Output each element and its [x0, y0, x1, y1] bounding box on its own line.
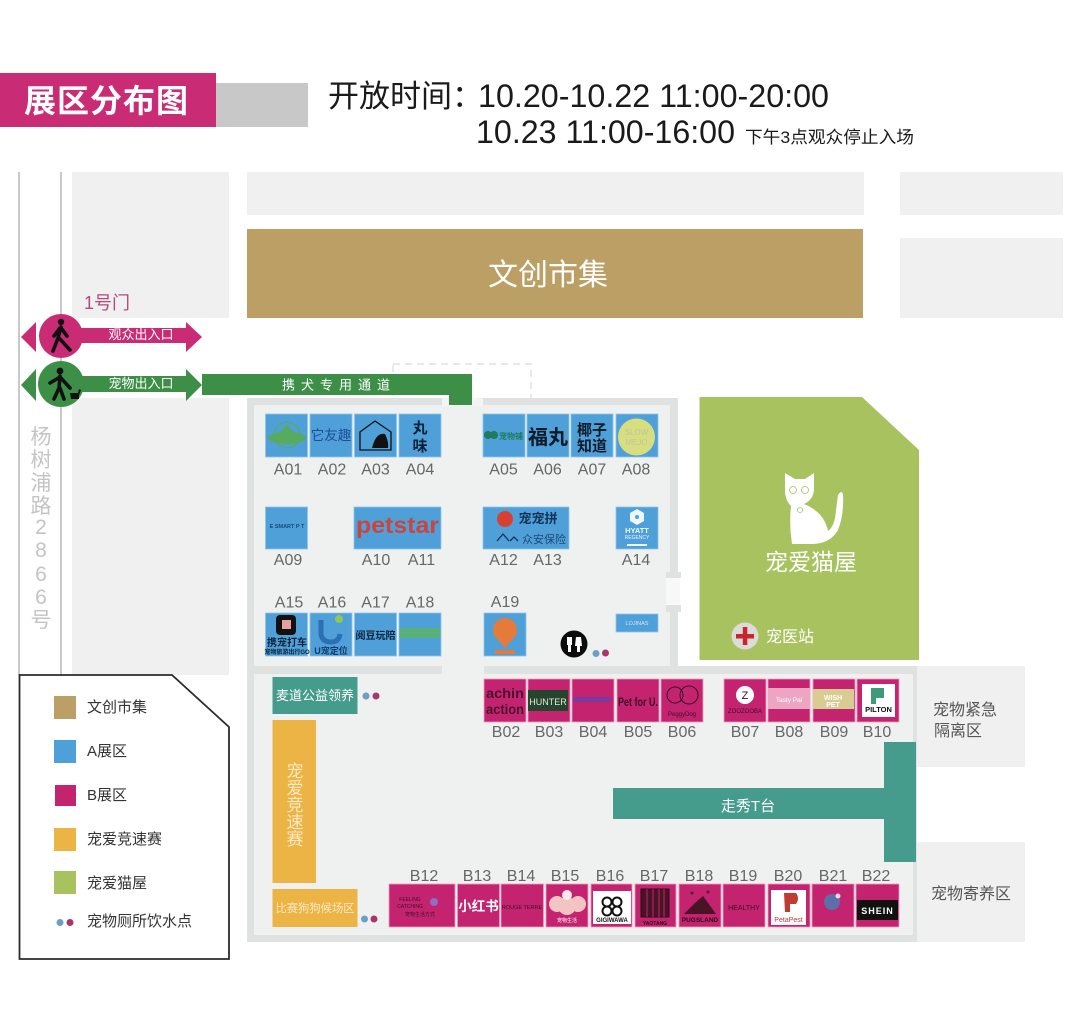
- booth A14: A14: [622, 552, 650, 569]
- street name: 杨: [30, 426, 52, 449]
- booth B13: B13: [463, 868, 491, 885]
- racing area: 爱: [286, 779, 304, 798]
- booth B04: B04: [579, 724, 607, 741]
- boarding area: 宠物寄养区: [931, 885, 1011, 903]
- booth A12 A13: [483, 507, 569, 569]
- audience entrance arrow: 观众出入口: [108, 327, 174, 342]
- booth B09: WISH: [824, 695, 842, 702]
- booth A02: 它友趣: [311, 427, 352, 443]
- gate label: 1号门: [84, 293, 130, 313]
- booth A17: 阅豆玩陪: [356, 629, 396, 642]
- booth B18: [679, 868, 721, 927]
- opening hours: [328, 78, 914, 150]
- racing area: 宠: [286, 762, 304, 781]
- booth B05: B05: [624, 724, 652, 741]
- isolation area: 宠物紧急: [933, 701, 997, 719]
- booth B02: B02: [492, 724, 520, 741]
- booth A08: MEJO: [625, 438, 648, 447]
- title: 展区分布图: [24, 83, 188, 119]
- icon: cat: [785, 473, 843, 544]
- booth A03: A03: [361, 462, 390, 478]
- booth A02: [310, 414, 352, 478]
- booth A02: A02: [318, 462, 346, 478]
- legend item 文创市集: 文创市集: [87, 699, 147, 716]
- booth A06: 福丸: [528, 426, 568, 449]
- booth A15: [264, 594, 310, 656]
- A zone row 1: [266, 414, 658, 478]
- booth B14: ROUGE TERRE: [502, 905, 542, 911]
- booth A03: [354, 414, 396, 478]
- B zone lower row: [389, 868, 899, 927]
- booth B09: PET: [826, 702, 841, 709]
- racing area: [272, 720, 316, 883]
- booth A04: 味: [412, 438, 428, 455]
- booth B18: PUGSLAND: [682, 917, 719, 924]
- booth A12 A13: A12: [489, 552, 518, 569]
- booth A04: [399, 414, 441, 478]
- booth B06: PeggyDog: [668, 712, 696, 718]
- booth B17: [635, 868, 676, 927]
- booth B02: achin: [486, 685, 524, 701]
- booth A16: A16: [318, 594, 346, 612]
- booth B20: B20: [774, 868, 802, 885]
- booth B21: [812, 868, 854, 927]
- legend item 宠爱竞速赛: [54, 828, 162, 851]
- catwalk T stage: [613, 742, 916, 862]
- booth B22: B22: [862, 868, 890, 885]
- booth A07: 知道: [577, 437, 607, 455]
- isolation area: 隔离区: [934, 722, 982, 740]
- booth B12: [389, 868, 455, 927]
- booth A04: 丸: [412, 420, 428, 437]
- booth A10 A11: petstar: [356, 512, 439, 538]
- vet station: [732, 622, 814, 650]
- racing area: 竞: [286, 796, 304, 815]
- booth A12 A13: A13: [533, 552, 562, 569]
- booth B13: [458, 868, 500, 927]
- legend item A展区: A展区: [87, 743, 127, 760]
- booth B03: HUNTER: [529, 697, 567, 707]
- legend item 宠物厕所饮水点: 宠物厕所饮水点: [87, 913, 192, 930]
- booth A10 A11: A10: [362, 552, 390, 569]
- booth A08: [616, 414, 658, 478]
- booth A04: A04: [406, 462, 434, 478]
- booth B08: [768, 679, 810, 741]
- opening hours: 下午3点观众停止入场: [745, 128, 914, 147]
- booth B02: [484, 679, 526, 741]
- booth B07: B07: [731, 724, 759, 741]
- booth B19: B19: [729, 868, 757, 885]
- racing area: 赛: [286, 829, 304, 849]
- booth A07: 椰子: [577, 421, 607, 439]
- booth A10 A11: A11: [408, 552, 435, 569]
- B zone upper row: [484, 679, 899, 741]
- dog lane: 携犬专用通道: [282, 377, 396, 392]
- booth B12: FEELING: [399, 897, 421, 903]
- legend item B展区: B展区: [87, 787, 127, 804]
- legend item B展区: [55, 785, 127, 806]
- booth B12: B12: [410, 868, 438, 885]
- booth A17: [354, 594, 396, 656]
- legend item 宠爱猫屋: [54, 871, 147, 894]
- booth A07: A07: [578, 462, 606, 478]
- street name: 路: [30, 495, 52, 518]
- hall B floor: [247, 664, 917, 942]
- vet station: 宠医站: [766, 628, 814, 646]
- audience entrance arrow: [21, 314, 202, 358]
- booth A18: [399, 594, 441, 656]
- booth A05: A05: [489, 462, 518, 478]
- booth A15: 携宠打车: [267, 636, 307, 649]
- booth B08: Tasty Pal: [776, 697, 803, 704]
- booth A14: REGENCY: [625, 535, 650, 541]
- booth B14: [501, 868, 544, 927]
- waiting area: 比赛狗狗候场区: [275, 901, 355, 915]
- opening hours: 10.20-10.22 11:00-20:00: [478, 78, 829, 114]
- small blue booth: LOJINAS: [626, 621, 649, 627]
- booth B19: HEALTHY: [728, 905, 760, 912]
- waiting area: [272, 889, 358, 927]
- booth A01: [266, 414, 308, 478]
- booth B07: Z: [742, 690, 749, 702]
- booth A08: SLOW: [625, 428, 649, 437]
- booth B19: [723, 868, 765, 927]
- hall A floor: [247, 398, 681, 676]
- booth B07: [724, 679, 766, 741]
- dots near waiting area: [361, 916, 378, 922]
- booth B10: B10: [863, 724, 891, 741]
- booth A06: [527, 414, 569, 478]
- legend item A展区: [54, 740, 127, 763]
- booth B22: SHEIN: [861, 906, 894, 916]
- booth B18: B18: [685, 868, 713, 885]
- booth A09: [266, 507, 308, 569]
- booth B10: [857, 679, 899, 741]
- panel: cat house: 宠爱猫屋: [765, 549, 857, 575]
- booth A18: A18: [406, 594, 434, 612]
- booth B17: YAOTANG: [643, 921, 667, 927]
- street name: 号: [30, 609, 52, 632]
- booth A01: A01: [274, 462, 302, 478]
- A zone row 2: [266, 507, 658, 569]
- booth B22: [856, 868, 899, 927]
- booth B16: GIGIWAWA: [596, 918, 628, 924]
- booth A07: [571, 414, 613, 478]
- pet entrance arrow: [21, 361, 202, 407]
- booth B02: action: [486, 701, 524, 717]
- booth A16: [310, 594, 352, 656]
- booth A19: [484, 594, 526, 656]
- booth A09: A09: [274, 552, 302, 569]
- road lines: [18, 172, 62, 675]
- booth A14: [616, 507, 658, 569]
- booth B03: [528, 679, 570, 741]
- opening hours: 10.23 11:00-16:00: [476, 114, 735, 150]
- booth B06: B06: [668, 724, 696, 741]
- street name: 树: [30, 449, 52, 472]
- racing area: 速: [286, 813, 304, 832]
- booth B20: [768, 868, 810, 927]
- booth A09: E SMART P T: [270, 524, 305, 530]
- isolation area: [917, 666, 1025, 767]
- legend item 文创市集: [54, 696, 147, 719]
- title: [0, 73, 308, 127]
- booth A10 A11: [354, 507, 441, 569]
- street name: 8: [35, 539, 47, 562]
- booth B16: [591, 868, 632, 927]
- icon: restroom: [560, 630, 588, 658]
- booth B16: B16: [596, 868, 624, 885]
- booth B10: PILTON: [865, 705, 892, 714]
- booth B15: [546, 868, 588, 927]
- street name: 浦: [30, 472, 52, 495]
- street name: 2: [35, 516, 47, 539]
- booth A12 A13: 宠宠拼: [518, 511, 558, 526]
- booth A12 A13: 众安保险: [522, 532, 566, 546]
- street name: [30, 426, 52, 632]
- booth B09: [813, 679, 855, 741]
- dashed gate outline: [393, 364, 531, 404]
- booth B09: B09: [820, 724, 848, 741]
- booth A15: 宠物旅游出行GO: [264, 648, 310, 656]
- legend: [20, 675, 229, 959]
- pet entrance arrow: 宠物出入口: [108, 376, 174, 391]
- dots near adoption: [362, 692, 380, 700]
- street name: 6: [35, 563, 47, 586]
- booth A05: 宠物铺: [499, 431, 523, 441]
- booth B21: B21: [819, 868, 847, 885]
- adoption area: [272, 677, 358, 714]
- booth B05: [617, 679, 659, 741]
- booth B12: CATCHING: [397, 904, 423, 910]
- booth B17: B17: [640, 868, 668, 885]
- street name: 6: [35, 586, 47, 609]
- booth A05: [483, 414, 525, 478]
- dog lane: [202, 374, 472, 405]
- boarding area: [917, 842, 1025, 942]
- booth A15: A15: [275, 594, 303, 612]
- A zone row 3: [264, 594, 658, 658]
- booth B20: PetaPest: [774, 917, 803, 924]
- booth B07: ZOOZOOBA: [728, 709, 762, 715]
- booth A19: A19: [491, 594, 519, 611]
- booth B15: B15: [551, 868, 579, 885]
- legend item 宠爱竞速赛: 宠爱竞速赛: [87, 830, 162, 848]
- booth A16: U宠定位: [314, 645, 348, 656]
- opening hours: 开放时间：: [328, 79, 483, 114]
- booth B08: B08: [775, 724, 803, 741]
- booth B04: [572, 679, 614, 741]
- booth A14: HYATT: [625, 526, 649, 535]
- pet toilet water dots: [592, 650, 609, 657]
- surrounding blocks: [72, 172, 1063, 675]
- panel: 文创市集: [247, 229, 863, 318]
- booth B06: [661, 679, 703, 741]
- booth A17: A17: [361, 594, 390, 612]
- booth B12: 宠物生活方式: [405, 911, 435, 918]
- small blue booth: [616, 614, 658, 632]
- panel: 文创市集: 文创市集: [488, 259, 608, 292]
- panel: cat house: [700, 397, 919, 660]
- booth A08: A08: [622, 462, 650, 478]
- adoption area: 麦道公益领养: [276, 688, 354, 703]
- booth B14: B14: [507, 868, 535, 885]
- catwalk T stage: 走秀T台: [721, 798, 775, 815]
- booth A06: A06: [533, 462, 562, 478]
- booth B03: B03: [535, 724, 563, 741]
- booth B13: 小红书: [458, 898, 499, 914]
- booth B05: Pet for U.: [618, 695, 658, 709]
- booth B15: 宠物生活: [557, 917, 577, 924]
- legend item 宠爱猫屋: 宠爱猫屋: [87, 875, 147, 892]
